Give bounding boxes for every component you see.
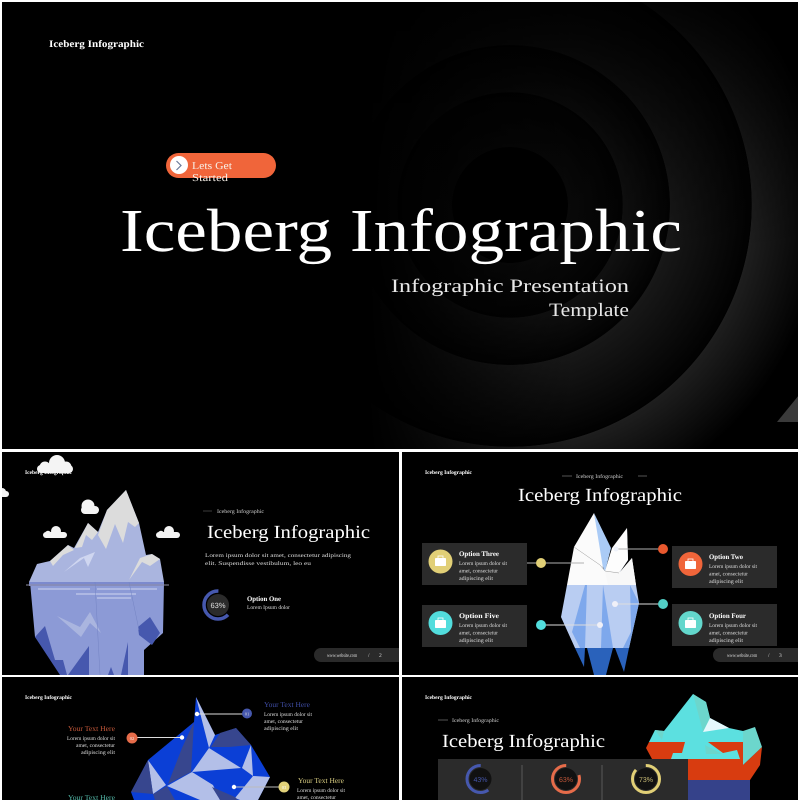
callout 01: 01 <box>245 712 249 716</box>
callout 01 <box>195 700 312 732</box>
option two card: amet, consectetur <box>709 572 748 578</box>
callout 03: Lorem ipsum dolor sit <box>297 788 345 794</box>
option two card: adipiscing elit <box>709 579 743 585</box>
subtitle: Template <box>549 300 629 321</box>
concentric ring background <box>424 37 798 449</box>
section label: Iceberg Infographic <box>576 474 624 480</box>
main title: Iceberg Infographic <box>120 198 682 265</box>
donut: 73% <box>632 766 660 792</box>
icon: briefcase <box>685 559 696 569</box>
icon: briefcase <box>435 556 446 566</box>
option one text: Option One <box>247 595 281 603</box>
footer pill: www.website.com <box>727 653 758 659</box>
option four card: adipiscing elit <box>709 638 743 644</box>
donut: 63%: 63% <box>559 777 573 784</box>
corner triangle <box>777 395 799 422</box>
icon: briefcase <box>685 618 696 628</box>
callout 02: adipiscing elit <box>81 750 115 756</box>
icon: clouds <box>0 455 180 538</box>
iceberg illustration <box>26 490 169 675</box>
callout 03: Your Text Here <box>298 776 345 785</box>
heading: Iceberg Infographic <box>442 732 605 752</box>
body text <box>205 553 351 567</box>
callout 01: adipiscing elit <box>264 726 298 732</box>
panel: iceberg with option one <box>0 452 400 675</box>
option one text: Lorem Ipsum dolor <box>247 605 290 611</box>
donut: 43% <box>467 766 494 792</box>
connector: option two <box>614 544 668 554</box>
option one text <box>247 595 290 611</box>
brand label: Iceberg Infographic <box>425 470 473 476</box>
callout 02 <box>67 724 184 756</box>
option two card: Lorem ipsum dolor sit <box>709 564 757 570</box>
button: lets get started: Started <box>192 173 229 184</box>
callout 03: 03 <box>282 785 287 790</box>
option three card: Lorem ipsum dolor sit <box>459 561 507 567</box>
callout 02: Lorem ipsum dolor sit <box>67 736 115 742</box>
panel: faceted iceberg <box>2 677 399 800</box>
footer pill <box>314 648 400 662</box>
panel: iceberg with donut stats <box>402 677 798 800</box>
option five card <box>422 605 527 647</box>
iceberg illustration <box>646 694 762 800</box>
option five card: adipiscing elit <box>459 638 493 644</box>
footer pill: www.website.com <box>327 653 358 659</box>
option five card: Lorem ipsum dolor sit <box>459 623 507 629</box>
donut: 63% <box>204 591 232 619</box>
option five card: Option Five <box>459 612 499 620</box>
section label <box>562 474 647 480</box>
iceberg illustration <box>561 513 639 675</box>
footer pill <box>713 648 800 662</box>
footer pill: 2 <box>379 653 382 659</box>
stats panel <box>438 759 688 800</box>
option three card <box>422 543 527 585</box>
brand label: Iceberg Infographic <box>425 695 473 701</box>
donut: 63% <box>552 766 580 792</box>
option two card <box>672 546 777 588</box>
subtitle: Infographic Presentation <box>391 276 630 297</box>
section label: Iceberg Infographic <box>217 509 265 515</box>
donut: 73%: 73% <box>639 777 653 784</box>
button: lets get started: Lets Get <box>192 161 232 172</box>
option three card: adipiscing elit <box>459 576 493 582</box>
callout 03 <box>232 776 345 800</box>
callout 01: Your Text Here <box>264 700 311 709</box>
option four card <box>672 604 777 646</box>
footer pill: / <box>368 653 370 659</box>
callout 02: Your Text Here <box>68 724 116 733</box>
panel: iceberg with four options <box>402 452 800 675</box>
heading: Iceberg Infographic <box>207 523 370 543</box>
brand label: Iceberg Infographic <box>25 470 73 476</box>
section label: Iceberg Infographic <box>452 718 500 724</box>
iceberg illustration <box>131 697 270 800</box>
footer pill: / <box>768 653 770 659</box>
callout 02: amet, consectetur <box>76 743 115 749</box>
option two card: Option Two <box>709 553 743 561</box>
body text: Lorem ipsum dolor sit amet, consectetur adipiscing <box>205 553 351 559</box>
option four card: Lorem ipsum dolor sit <box>709 623 757 629</box>
connector: option five <box>536 620 603 630</box>
option three card: amet, consectetur <box>459 568 498 574</box>
panel: cover slide <box>2 2 799 449</box>
option five card: amet, consectetur <box>459 630 498 636</box>
subtitle <box>391 276 630 321</box>
option three card: Option Three <box>459 550 499 558</box>
icon: briefcase <box>435 618 446 628</box>
callout 02: 02 <box>130 736 134 741</box>
brand label: Iceberg Infographic <box>25 695 73 701</box>
donut: 43%: 43% <box>473 777 488 784</box>
connector: option four <box>612 599 668 609</box>
donut: 63%: 63% <box>210 601 226 610</box>
callout 01: amet, consectetur <box>264 719 303 725</box>
callout 01: Lorem ipsum dolor sit <box>264 712 312 718</box>
brand label: Iceberg Infographic <box>49 39 145 50</box>
heading: Iceberg Infographic <box>518 486 682 506</box>
button: lets get started <box>166 153 276 184</box>
body text: elit. Suspendisse vestibulum, leo eu <box>205 561 311 567</box>
connector: option three <box>527 558 584 568</box>
option four card: amet, consectetur <box>709 630 748 636</box>
option four card: Option Four <box>709 612 746 620</box>
footer pill: 3 <box>779 653 782 659</box>
